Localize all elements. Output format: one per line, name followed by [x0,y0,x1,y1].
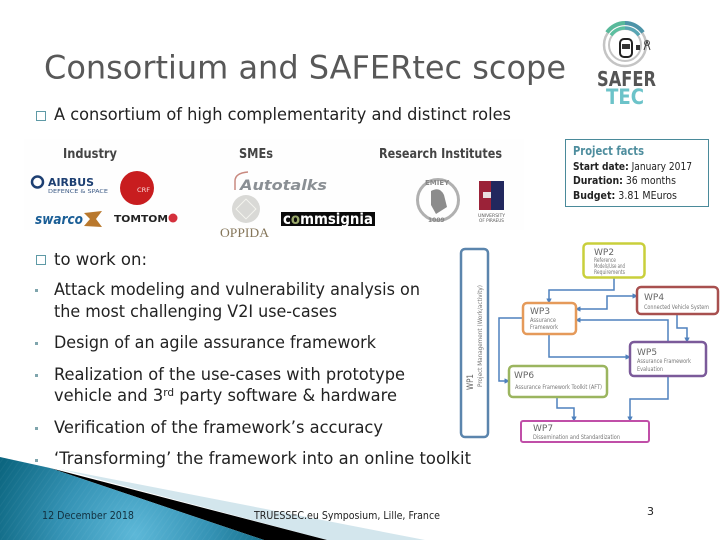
WP3 box: WP3 [530,307,550,317]
WP2 box: Models/Use and [594,263,625,270]
bullet list: Design of an agile assurance framework [54,333,376,353]
SAFERtec logo: SAFER [597,67,656,91]
WP2 box: Requirements [594,269,625,276]
logo: CRF [120,171,154,205]
logo: TomTom: TOMTOM [114,214,168,225]
intro bullet: A consortium of high complementarity and distinct roles [54,105,511,125]
SAFERtec logo: TEC [606,85,644,109]
title: Consortium and SAFERtec scope [44,48,566,86]
WP3 box: Framework [530,324,558,331]
bullet list: Attack modeling and vulnerability analysis on [54,280,420,300]
WP2 box: Reference [594,257,616,264]
panel: project facts: Project facts [573,144,644,158]
logo: Research institute emblem [418,179,458,224]
WP1 box [461,249,488,437]
WP2 box: WP2 [594,248,614,258]
page number: 3 [647,505,654,518]
WP6 box: WP6 [514,371,534,381]
bullet list: vehicle and 3 [54,386,168,406]
logo: University of Piraeus: UNIVERSITY [478,213,506,218]
WP1 box: Project Management (Work/activity) [477,285,484,387]
panel: project facts: Duration: 36 months [573,175,676,187]
logo: University of Piraeus [478,181,506,223]
WP3 box: Assurance [530,317,556,324]
WP7 box [521,421,649,442]
bullet list: party software & hardware [174,386,397,406]
heading: Industry: Industry [63,147,117,162]
logo: CRF: CRF [137,187,151,194]
WP3 box [523,303,576,334]
heading: SMEs: SMEs [239,147,273,162]
WP6 box: Assurance Framework Toolkit (AFT) [515,384,602,391]
logo: Swarco: swarco [35,212,83,228]
chart: work package diagram [461,244,718,442]
logo: Autotalks: Autotalks [239,178,327,194]
logo: Oppida [220,195,270,240]
bullet list: to work on: [54,250,147,270]
heading: Research Institutes: Research Institutes [379,147,502,162]
arrows between work packages [499,277,687,421]
bullet list: rd [163,386,174,399]
WP6 box [509,366,607,397]
bullet list: ‘Transforming’ the framework into an online toolkit [54,449,471,469]
bullet list: Realization of the use-cases with prototype [54,365,405,385]
logo: Airbus [32,176,108,195]
WP5 box [630,342,706,376]
bullet list [35,250,471,469]
footer wedge decoration [0,457,425,540]
logo: Airbus: DEFENCE & SPACE [48,189,108,195]
WP7 box: WP7 [533,424,553,434]
SAFERtec logo [597,23,656,109]
logo: Research institute emblem: 1009 [428,217,445,224]
WP5 box: Assurance Framework [637,358,691,365]
panel: project facts: Start date: January 2017 [573,161,692,173]
bullet list: the most challenging V2I use-cases [54,302,337,322]
WP5 box: Evaluation [637,366,663,373]
logo: University of Piraeus: OF PIRAEUS [479,218,504,223]
WP1 box: WP1 [466,374,476,390]
footer date: 12 December 2018 [42,510,134,522]
WP2 box [584,244,644,278]
WP4 box: WP4 [644,293,664,303]
logo: Airbus: AIRBUS [48,176,94,189]
logo: Autotalks [235,172,327,194]
logo: Oppida: OPPIDA [220,225,270,240]
footer event name: TRUESSEC.eu Symposium, Lille, France [253,510,440,522]
logo: Commsignia: commsignia [283,210,373,228]
WP5 box: WP5 [637,348,657,358]
logo: Research institute emblem: EMIEY [425,179,450,187]
panel: partner logos [24,139,524,240]
panel: project facts: Budget: 3.81 MEuros [573,190,677,202]
WP7 box: Dissemination and Standardization [533,434,620,441]
bullet list: Verification of the framework’s accuracy [54,418,383,438]
WP4 box [637,287,718,314]
panel: project facts [566,140,708,206]
